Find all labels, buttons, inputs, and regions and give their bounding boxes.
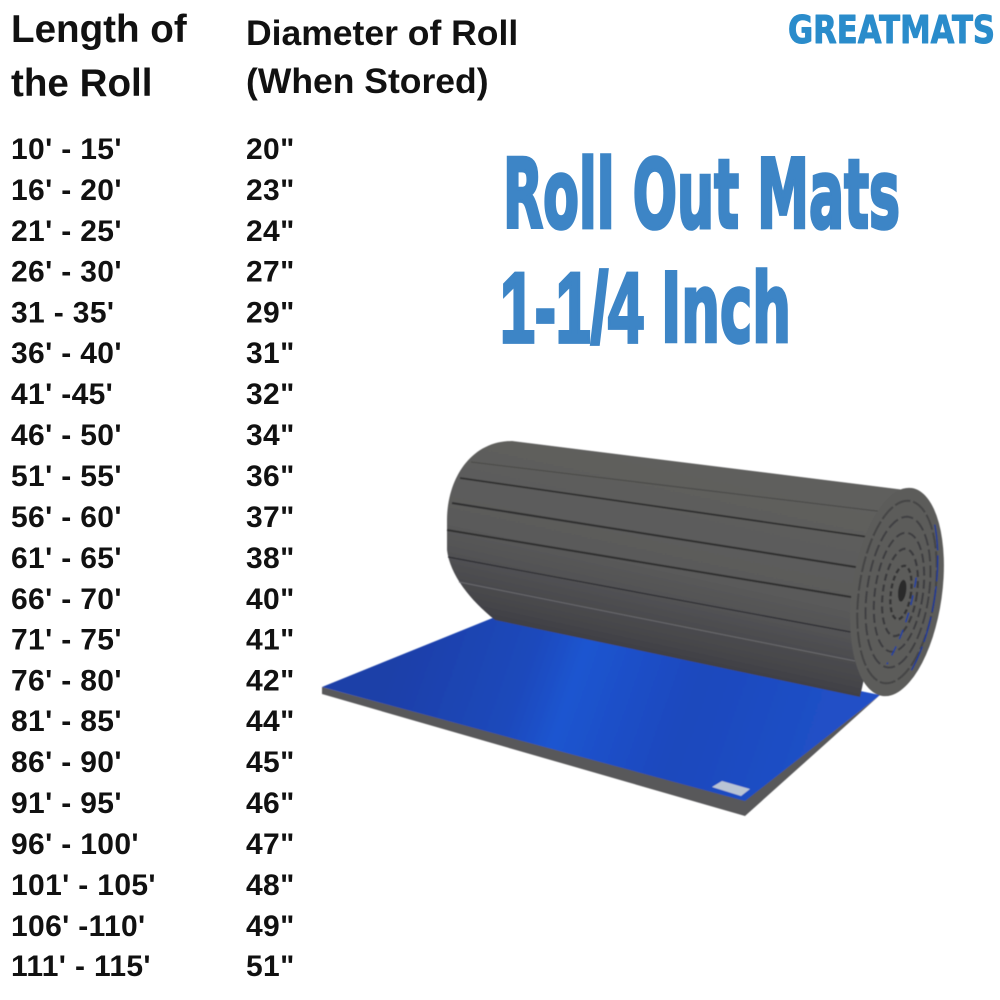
column heading: length of the roll: Length of [11,8,187,51]
illustration: rolled mat [322,441,956,816]
column heading: diameter of roll: (When Stored) [246,61,489,101]
diameter column values: 51" [246,950,295,983]
length column values: 21' - 25' [11,215,122,248]
length column values: 81' - 85' [11,705,122,738]
length column values: 66' - 70' [11,583,122,616]
length column values: 16' - 20' [11,174,122,207]
roll end cap [838,482,956,702]
length column values: 56' - 60' [11,501,122,534]
title: Inch [661,254,791,364]
diameter column values: 40" [246,583,295,616]
slat grooves [447,462,885,661]
length column values: 10' - 15' [11,133,122,166]
length column values: 111' - 115' [11,950,151,983]
roll body [447,441,905,697]
diameter column values: 46" [246,787,295,820]
length column values: 101' - 105' [11,869,156,902]
length column values: 86' - 90' [11,746,122,779]
column heading: diameter of roll: Diameter of Roll [246,13,518,53]
diameter column values: 36" [246,460,295,493]
length column values: 76' - 80' [11,664,122,698]
length column values: 36' - 40' [11,337,122,370]
diameter column values: 38" [246,542,295,575]
length column values: 26' - 30' [11,256,122,288]
diameter column values [246,133,295,983]
diameter column values: 34" [246,419,295,452]
diameter column values: 41" [246,624,295,656]
diameter column values: 27" [246,256,295,288]
diameter column values: 48" [246,869,295,902]
length column values: 51' - 55' [11,460,122,493]
length column values: 106' -110' [11,910,146,943]
column heading: length of the roll [11,8,187,105]
diameter column values: 47" [246,828,295,861]
diameter column values: 29" [246,296,295,330]
length column values: 71' - 75' [11,624,122,656]
column heading: diameter of roll [246,13,518,101]
diameter column values: 32" [246,378,295,411]
length column values: 46' - 50' [11,419,122,452]
title [500,140,900,364]
diameter column values: 44" [246,705,295,738]
length column values: 31 - 35' [11,296,114,330]
flat mat section [322,617,880,816]
length column values: 96' - 100' [11,828,139,861]
column heading: length of the roll: the Roll [11,62,152,105]
diameter column values: 23" [246,174,295,207]
title: 1-1/4 [500,252,643,363]
length column values: 41' -45' [11,378,113,411]
diameter column values: 31" [246,337,295,370]
diameter column values: 37" [246,501,295,534]
length column values: 61' - 65' [11,542,122,575]
diameter column values: 42" [246,664,295,698]
diameter column values: 45" [246,746,295,779]
diameter column values: 20" [246,133,295,166]
length column values [11,133,156,983]
diameter column values: 49" [246,910,295,943]
length column values: 91' - 95' [11,787,122,820]
diameter column values: 24" [246,215,295,248]
